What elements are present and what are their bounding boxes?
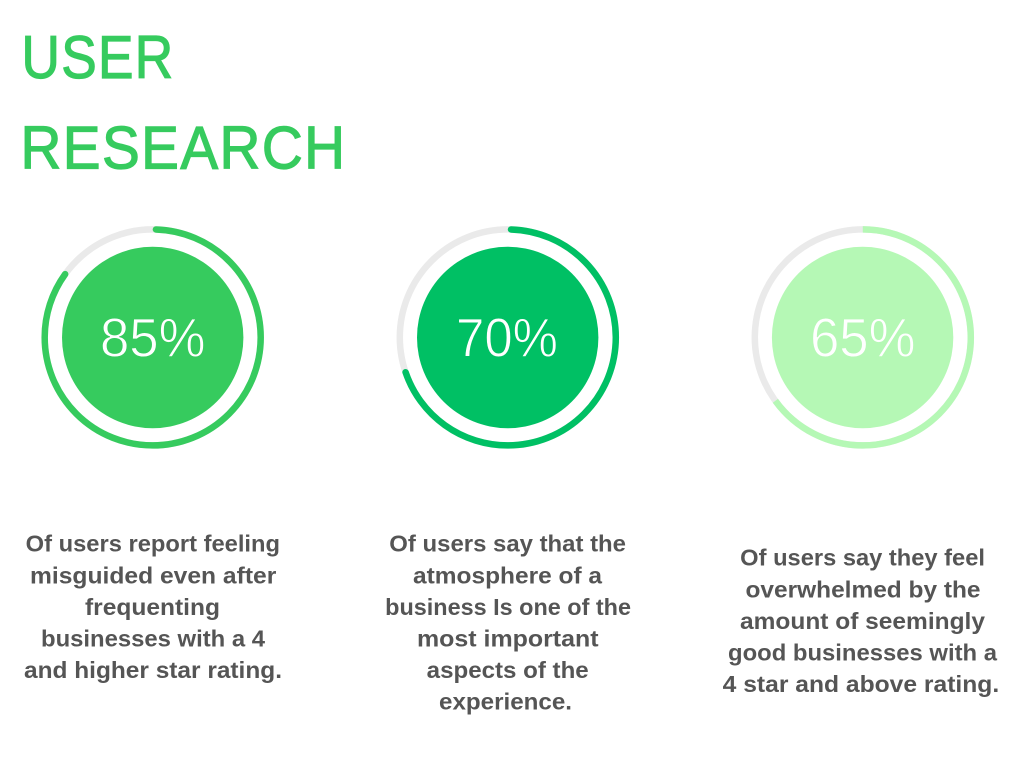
panel: 85% gauge <box>45 229 261 445</box>
text block: 70% description: Of users say that the <box>389 531 626 557</box>
text block: 85% description: frequenting <box>85 594 220 620</box>
text block: 65% description: good businesses with a <box>728 640 997 666</box>
text block: 70% description: aspects of the <box>427 657 589 683</box>
text block: 70% description: atmosphere of a <box>413 562 602 588</box>
text block: 65% description: Of users say they feel <box>740 545 985 571</box>
text block: 85% description: businesses with a 4 <box>41 626 265 652</box>
title <box>20 23 346 181</box>
text block: 85% description: and higher star rating. <box>24 657 282 683</box>
panel: 70% gauge <box>400 229 616 445</box>
text block: 70% description <box>385 531 631 715</box>
title: USER <box>22 23 174 91</box>
text block: 65% description <box>723 545 999 697</box>
panel: 65% gauge: 65% <box>810 306 916 368</box>
panel: 85% gauge: 85% <box>100 307 206 369</box>
text block: 85% description <box>24 531 282 683</box>
text block: 70% description: business Is one of the <box>385 594 631 620</box>
text block: 85% description: misguided even after <box>30 562 276 588</box>
panel: 65% gauge <box>755 229 971 445</box>
text block: 70% description: experience. <box>439 689 572 715</box>
text block: 65% description: overwhelmed by the <box>746 576 980 602</box>
text block: 65% description: 4 star and above rating. <box>723 671 999 697</box>
panel: 70% gauge: 70% <box>456 306 558 368</box>
title: RESEARCH <box>20 113 346 181</box>
text block: 65% description: amount of seemingly <box>740 608 985 634</box>
text block: 85% description: Of users report feeling <box>26 531 280 557</box>
text block: 70% description: most important <box>417 626 599 652</box>
